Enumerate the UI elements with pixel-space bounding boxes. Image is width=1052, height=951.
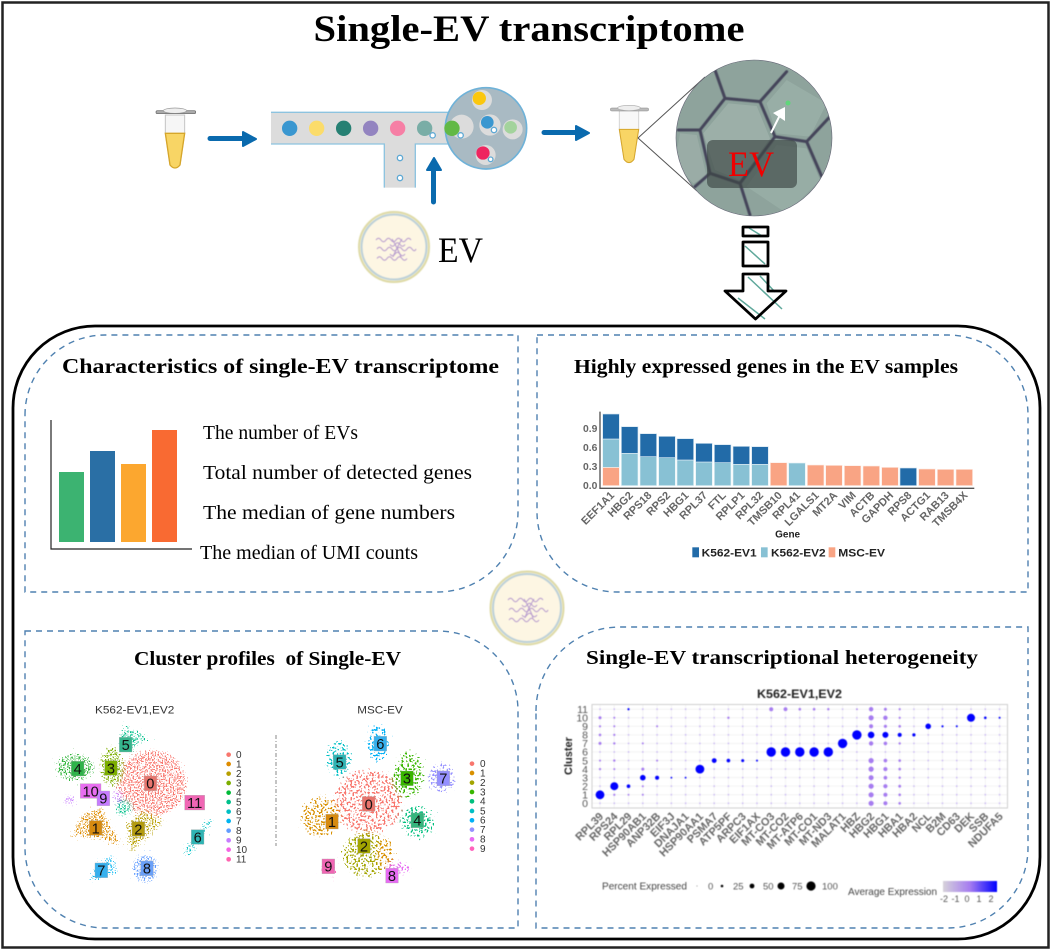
x axis gene labels: RPS24	[587, 810, 621, 844]
cluster labels: MSC: 2	[360, 839, 368, 855]
heading: characteristics: Characteristics of single-EV transcriptome	[62, 354, 499, 378]
chart: K562 t-SNE: K562-EV1,EV2	[95, 704, 174, 716]
legend: MSC clusters: 3	[480, 787, 486, 798]
x axis gene labels: ANP32B	[624, 811, 663, 850]
cluster labels: MSC: 1	[328, 815, 336, 831]
legend: MSC clusters: 5	[480, 806, 486, 817]
legend: average expression: 0	[964, 894, 970, 904]
y axis labels: 9	[582, 721, 588, 733]
legend: MSC clusters: 6	[480, 816, 486, 827]
legend: K562 clusters	[226, 750, 248, 866]
legend: MSC clusters: 7	[480, 825, 486, 836]
panel: heterogeneity	[536, 627, 1028, 928]
y axis labels: 6	[582, 747, 588, 759]
stacked bar chart: ACTG1	[898, 490, 933, 524]
stacked bar chart: MT2A	[810, 490, 840, 519]
y axis labels: 2	[582, 781, 588, 793]
stacked bar chart: LGALS1	[783, 490, 822, 529]
legend: K562 clusters: 9	[236, 836, 242, 847]
microfluidic chip	[271, 88, 527, 188]
cluster labels: MSC: 0	[365, 797, 373, 813]
stacked bar chart: HBG1	[661, 490, 691, 520]
cluster labels: MSC: 6	[376, 737, 384, 753]
chart: MSC t-SNE: MSC-EV	[357, 704, 403, 716]
stacked bar chart: RPLP1	[714, 490, 747, 523]
x axis gene labels: HSP90AB1	[600, 811, 649, 859]
x axis gene labels: NCL	[910, 810, 935, 835]
legend: average expression: -1	[951, 894, 960, 904]
stacked bar chart: RAB13	[918, 490, 952, 524]
legend: K562 clusters: 7	[236, 816, 242, 827]
legend: percent expressed: 0	[708, 882, 713, 892]
y axis labels	[576, 704, 588, 810]
cluster labels: K562: 4	[74, 762, 82, 778]
stacked bar chart: ACTB	[847, 490, 877, 520]
x axis gene labels: HBA1	[876, 811, 906, 840]
cluster labels: K562: 10	[83, 784, 99, 800]
cluster labels: MSC: 3	[403, 772, 411, 788]
x axis gene labels: CD63	[935, 811, 963, 839]
stacked bar chart: RPL32	[733, 490, 766, 522]
legend: samples: K562-EV1	[702, 547, 757, 559]
legend: K562 clusters: 6	[236, 807, 242, 818]
title: Single-EV transcriptome	[314, 9, 744, 50]
stacked bar chart: 0.0	[583, 481, 598, 492]
x axis gene labels: MT-CO1	[782, 811, 820, 849]
y axis labels: 0	[582, 798, 588, 810]
stacked bar chart: Gene	[775, 529, 801, 540]
cluster labels: K562: 6	[194, 830, 202, 846]
cluster labels: MSC	[322, 736, 450, 885]
cluster labels: MSC: 4	[413, 814, 421, 830]
cluster labels: K562: 11	[187, 796, 202, 812]
x axis gene labels: EIF3J	[648, 811, 678, 840]
stacked bar chart: RPS8	[886, 490, 914, 518]
cluster labels: K562: 9	[99, 792, 107, 808]
legend: K562 clusters: 10	[236, 845, 248, 856]
legend: percent expressed: 75	[792, 882, 803, 892]
x axis gene labels: NDUFA5	[966, 811, 1006, 850]
x axis gene labels: DEK	[952, 811, 977, 836]
legend: percent expressed: 100	[822, 882, 838, 892]
legend: average expression: 1	[976, 894, 982, 904]
legend: K562 clusters: 1	[236, 759, 242, 770]
cluster labels: MSC: 5	[336, 755, 344, 771]
legend: percent expressed	[602, 880, 838, 892]
stacked bar chart: HBG2	[606, 490, 636, 520]
icon: collected tube	[610, 105, 649, 163]
panel: highly expressed genes	[537, 335, 1028, 592]
text: metrics list: Total number of detected genes	[203, 462, 472, 484]
y axis labels: 11	[577, 704, 588, 716]
stacked bar chart: RPL37	[677, 490, 710, 522]
x axis gene labels: MT-ND3	[797, 811, 834, 848]
arrow: chip to collected tube	[544, 126, 589, 140]
x axis gene labels: RPL39	[573, 811, 606, 843]
legend: K562 clusters: 8	[236, 826, 242, 837]
x axis gene labels: HBA2	[890, 811, 920, 840]
stacked bar chart: 0.9	[583, 424, 598, 435]
cluster labels: K562: 5	[122, 738, 130, 754]
legend: K562 clusters: 3	[236, 778, 242, 789]
icon: EV particle (top)	[359, 212, 429, 282]
stacked bar chart: TMSB10	[746, 490, 785, 529]
x axis gene labels: DNAJA1	[652, 811, 692, 850]
x axis gene labels: PSMA7	[685, 811, 720, 846]
cluster labels: K562: 3	[107, 761, 115, 777]
x axis gene labels: MT-CO3	[739, 811, 777, 849]
x axis gene labels: HBG2	[847, 811, 877, 841]
arrow: white pointer	[771, 107, 785, 133]
cluster labels: K562: 8	[143, 862, 151, 878]
legend: percent expressed: Percent Expressed	[602, 880, 687, 892]
legend: K562 clusters: 11	[236, 855, 247, 866]
x axis gene labels: MT-CO2	[754, 811, 792, 849]
text: metrics list: The median of UMI counts	[200, 542, 418, 564]
legend: samples: K562-EV2	[771, 547, 826, 559]
icon: sample tube (input)	[156, 108, 196, 168]
stacked bar chart: GAPDH	[860, 490, 896, 526]
x axis gene labels: MALAT1	[809, 811, 849, 850]
y axis labels: 4	[582, 764, 588, 776]
y axis labels: 1	[582, 790, 588, 802]
cluster labels: MSC: 9	[324, 860, 332, 876]
stacked bar chart: RPL41	[770, 490, 803, 522]
label: EV: EV	[438, 230, 483, 270]
icon: bar chart	[51, 420, 192, 549]
x axis gene labels: HBZ	[839, 810, 863, 835]
arrow: EV into chip	[427, 158, 441, 202]
y axis labels: 3	[582, 772, 588, 784]
cluster labels: MSC: 8	[388, 869, 396, 885]
dot plot: Cluster	[563, 736, 575, 775]
legend: K562 clusters: 4	[236, 788, 242, 799]
legend: samples	[692, 547, 886, 559]
x axis gene labels: EIF1AX	[727, 810, 764, 846]
legend: MSC clusters: 1	[480, 768, 486, 779]
legend: MSC clusters: 8	[480, 835, 486, 846]
legend: samples: MSC-EV	[838, 547, 886, 559]
arrow: hatched down arrow	[725, 227, 786, 319]
icon: EV particle (center)	[490, 572, 564, 644]
panel: cluster profiles	[25, 631, 518, 928]
legend: MSC clusters: 2	[480, 778, 486, 789]
x axis gene labels: RPL29	[602, 811, 635, 843]
stacked bar chart: 0.6	[583, 443, 598, 454]
stacked bar chart: TMSB4X	[930, 489, 971, 530]
legend: K562 clusters: 0	[236, 750, 242, 761]
stacked bar chart: FTL	[706, 489, 729, 512]
x axis gene labels: MT-ATP6	[765, 811, 806, 852]
y axis labels: 8	[582, 730, 588, 742]
x axis gene labels: B2M	[924, 811, 949, 836]
legend: MSC clusters	[470, 759, 486, 855]
stacked bar chart: RPS18	[621, 490, 654, 523]
dot plot	[563, 689, 1008, 904]
legend: K562 clusters: 5	[236, 797, 242, 808]
legend: average expression: -2	[940, 894, 948, 904]
legend: K562 clusters: 2	[236, 769, 242, 780]
y axis labels: 7	[582, 738, 588, 750]
cluster labels: K562: 1	[92, 821, 100, 837]
legend: percent expressed: 50	[763, 882, 774, 892]
heading: highly expressed genes: Highly expressed genes in the EV samples	[574, 356, 958, 378]
x axis gene labels: SSB	[967, 811, 991, 835]
cluster labels: K562: 2	[134, 822, 142, 838]
cluster labels: MSC: 7	[439, 772, 447, 788]
y axis labels: 5	[582, 755, 588, 767]
stacked bar chart: RPS2	[644, 490, 673, 518]
x axis gene labels: ATP5PF	[697, 810, 735, 848]
stacked bar chart	[579, 412, 974, 559]
panel: characteristics	[25, 335, 518, 592]
arrow: tube to chip	[210, 132, 256, 146]
cluster labels: K562	[71, 737, 205, 880]
heading: cluster profiles: Cluster profiles of Single-EV	[134, 648, 402, 670]
legend: average expression: 2	[988, 894, 994, 904]
x axis gene labels	[573, 810, 1006, 859]
legend: average expression: Average Expression	[848, 886, 937, 898]
stacked bar chart: VIM	[836, 490, 859, 512]
x axis gene labels: ARPC3	[714, 811, 749, 845]
main rounded container	[13, 326, 1040, 939]
legend: MSC clusters: 4	[480, 797, 486, 808]
cluster labels: K562: 7	[97, 864, 105, 880]
x axis gene labels: HSP90AA1	[657, 811, 706, 859]
heading: heterogeneity: Single-EV transcriptional heterogeneity	[586, 647, 978, 669]
stacked bar chart: EEF1A1	[579, 490, 617, 527]
legend: percent expressed: 25	[733, 882, 744, 892]
blue high-expression dots	[596, 708, 1001, 799]
x axis gene labels: HBG1	[861, 811, 892, 841]
chart: K562 t-SNE	[56, 704, 248, 883]
legend: MSC clusters: 9	[480, 844, 486, 855]
dot plot: K562-EV1,EV2	[757, 689, 842, 701]
legend: average expression	[848, 881, 997, 904]
text: metrics list: The median of gene numbers	[203, 502, 455, 524]
purple low-expression dots	[598, 707, 901, 806]
chart: MSC t-SNE	[300, 704, 486, 885]
stacked bar chart: 0.3	[583, 462, 598, 473]
text: metrics list	[200, 422, 472, 564]
microscope image with EV	[675, 60, 832, 216]
cluster labels: K562: 0	[146, 777, 154, 793]
microscope image with EV: EV	[728, 144, 774, 184]
y axis labels: 10	[576, 712, 588, 724]
zoom lines	[638, 77, 705, 191]
text: metrics list: The number of EVs	[203, 422, 358, 444]
legend: MSC clusters: 0	[480, 759, 486, 770]
